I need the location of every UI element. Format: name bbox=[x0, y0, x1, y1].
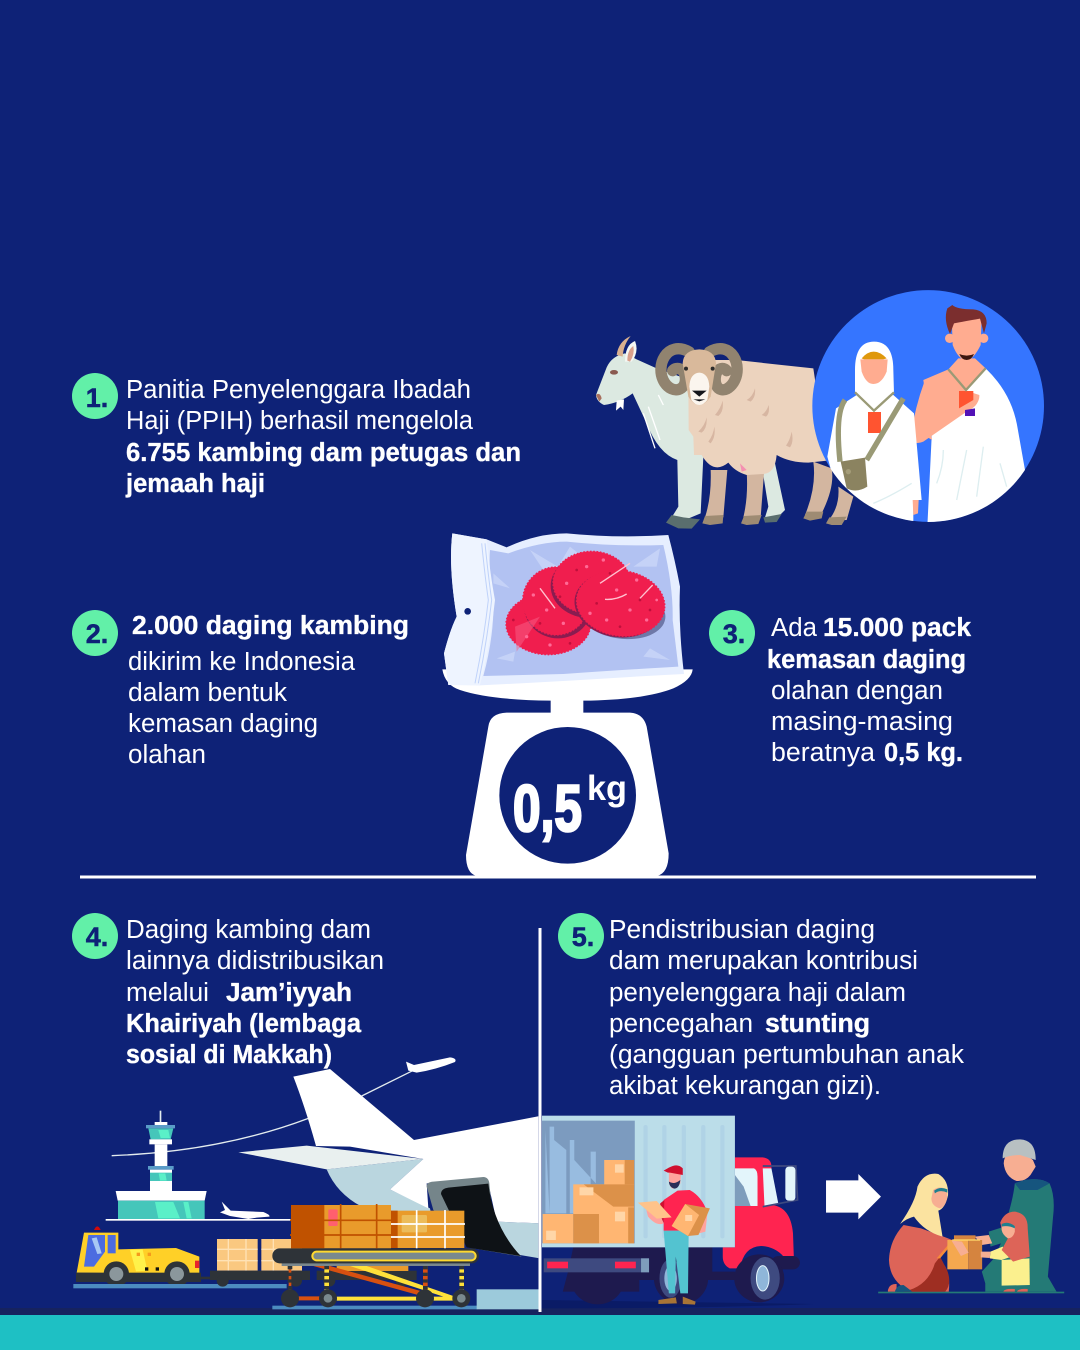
weight label 0,5 kg: 0,5 bbox=[513, 771, 582, 845]
text block 1: 6.755 kambing dam petugas dan bbox=[126, 439, 521, 467]
text block 2 bbox=[128, 612, 409, 769]
icon: truck bbox=[542, 1116, 800, 1304]
icon: female pilgrim bbox=[827, 342, 922, 527]
text block 3: kemasan daging bbox=[767, 646, 966, 674]
text block 4: lainnya didistribusikan bbox=[126, 947, 384, 975]
icon: airport tug bbox=[73, 1226, 287, 1288]
illustration: vacuum meat pack on scale bbox=[442, 533, 693, 876]
icon: family receiving box bbox=[878, 1139, 1064, 1293]
text block 3 bbox=[767, 614, 972, 767]
text block 4: Khairiyah (lembaga bbox=[126, 1010, 362, 1038]
icon: cargo crates bbox=[290, 1204, 465, 1248]
text block 1: jemaah haji bbox=[125, 470, 265, 498]
father bbox=[975, 1139, 1057, 1292]
badge 1 bbox=[72, 373, 118, 419]
illustration: goat, ram and pilgrims bbox=[596, 290, 1044, 529]
text block 3: olahan dengan bbox=[771, 677, 943, 705]
illustration: airport cargo scene bbox=[73, 1057, 540, 1309]
illustration: truck, courier, arrow and family bbox=[542, 1116, 1064, 1308]
text block 3: beratnya bbox=[771, 739, 876, 767]
text block 4: Daging kambing dam bbox=[126, 916, 371, 944]
text block 3: 15.000 pack bbox=[823, 614, 972, 642]
icon: conveyor loader bbox=[272, 1248, 479, 1307]
text block 5: Pendistribusian daging bbox=[609, 916, 875, 944]
badge 4 bbox=[72, 913, 118, 959]
text block 3: masing-masing bbox=[771, 708, 953, 736]
icon: male pilgrim bbox=[911, 305, 1025, 527]
badge 2 bbox=[72, 610, 118, 656]
icon: pilgrim circle bbox=[812, 290, 1044, 522]
icon: pilgrims bbox=[827, 305, 1025, 527]
icon: goat bbox=[596, 336, 785, 529]
truck shadow bbox=[542, 1300, 813, 1308]
text block 2: 2.000 daging kambing bbox=[132, 612, 409, 640]
text block 4: sosial di Makkah) bbox=[126, 1041, 332, 1069]
ground strips bbox=[272, 1289, 539, 1309]
text block 4: melalui bbox=[126, 979, 209, 1007]
icon: parked plane bbox=[220, 1202, 270, 1219]
text block 3: Ada bbox=[771, 614, 818, 642]
icon: airplane tail and fuselage bbox=[238, 1069, 540, 1258]
child bbox=[981, 1212, 1030, 1292]
flight path and small plane bbox=[112, 1057, 456, 1156]
text block 5: penyelenggara haji dalam bbox=[609, 979, 906, 1007]
badge 3: 3. bbox=[723, 619, 745, 649]
icon: scale bbox=[442, 669, 693, 876]
weight label 0,5 kg: kg bbox=[587, 769, 627, 808]
text block 4: Jam’iyyah bbox=[226, 979, 352, 1007]
text block 3: 0,5 kg. bbox=[884, 739, 963, 767]
icon: control tower bbox=[106, 1111, 291, 1221]
cargo boxes bbox=[543, 1160, 634, 1243]
text block 2: dikirim ke Indonesia bbox=[128, 648, 356, 676]
icon: meat patties bbox=[506, 551, 669, 655]
badge 5: 5. bbox=[572, 922, 594, 952]
badge 3 bbox=[709, 610, 755, 656]
text block 5: dam merupakan kontribusi bbox=[609, 947, 918, 975]
text block 1 bbox=[125, 376, 521, 498]
text block 5: akibat kekurangan gizi). bbox=[609, 1072, 881, 1100]
badge 4: 4. bbox=[86, 922, 108, 952]
text block 2: olahan bbox=[128, 741, 206, 769]
icon: ram bbox=[661, 349, 853, 525]
text block 2: kemasan daging bbox=[128, 710, 318, 738]
gift box bbox=[947, 1235, 982, 1269]
text block 5 bbox=[609, 916, 964, 1100]
icon: delivery man bbox=[638, 1165, 710, 1305]
text block 1: Haji (PPIH) berhasil mengelola bbox=[126, 407, 474, 435]
mother bbox=[888, 1174, 968, 1292]
text block 1: Panitia Penyelenggara Ibadah bbox=[126, 376, 471, 404]
text block 5: stunting bbox=[765, 1010, 870, 1038]
arrow bbox=[826, 1174, 881, 1219]
text block 5: (gangguan pertumbuhan anak bbox=[609, 1041, 964, 1069]
text block 2: dalam bentuk bbox=[128, 679, 287, 707]
badge 2: 2. bbox=[86, 619, 108, 649]
icon: vacuum pack bbox=[444, 533, 684, 685]
text block 4 bbox=[126, 916, 384, 1069]
badge 1: 1. bbox=[86, 383, 108, 413]
footer band bbox=[0, 1308, 1080, 1350]
icon: baggage trolley bbox=[210, 1239, 417, 1287]
text block 5: pencegahan bbox=[609, 1010, 753, 1038]
badge 5 bbox=[558, 913, 604, 959]
